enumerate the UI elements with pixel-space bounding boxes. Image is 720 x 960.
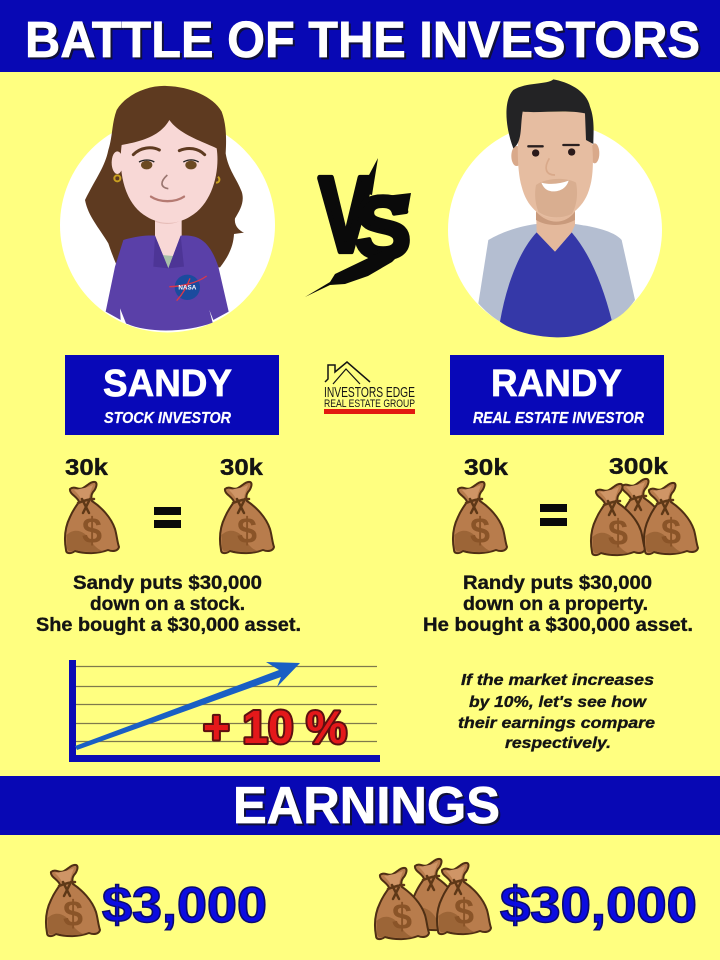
Sandy earrings [114, 175, 219, 183]
text block: Sandy description: down on a stock. [90, 594, 245, 615]
panel: Sandy name plate: SANDY [103, 363, 232, 405]
icon: money bag [46, 865, 100, 936]
NASA patch: NASA [178, 284, 197, 291]
text block: market note: their earnings compare [458, 715, 655, 732]
chart: market up 10 percent [69, 660, 380, 762]
icon: money bag [453, 482, 507, 553]
panel: Sandy equation: 30k [220, 454, 263, 480]
panel: Sandy equation: 30k [65, 454, 108, 480]
Sandy brows, eyes, nose, mouth [133, 148, 205, 155]
icon: money bag [65, 482, 119, 553]
text block: Randy description: down on a property. [463, 594, 648, 615]
text block: Randy description: Randy puts $30,000 [463, 573, 652, 594]
text block: Sandy description: She bought a $30,000 asset. [36, 615, 301, 636]
amount: $30,000 [500, 877, 697, 933]
icon: three money bags [375, 859, 491, 939]
VS emblem [305, 155, 411, 297]
panel: Randy name plate: RANDY [491, 363, 622, 405]
arrow [75, 662, 300, 750]
panel: Randy portrait [448, 79, 662, 337]
logo: Investors Edge: REAL ESTATE GROUP [324, 398, 415, 410]
logo: Investors Edge: INVESTORS EDGE [324, 384, 415, 401]
Sandy face [121, 120, 217, 223]
Sandy hair [85, 86, 244, 267]
Randy jacket [478, 224, 635, 322]
Randy brows, eyes, nose, mouth [528, 145, 579, 146]
Sandy purple shirt [106, 235, 229, 331]
text block: market note: respectively. [505, 735, 611, 752]
icon: three money bags: $ [454, 891, 474, 932]
panel: Randy equation: 30k [464, 454, 508, 480]
NASA patch [169, 275, 207, 301]
amount: $3,000 [102, 877, 267, 933]
earnings banner: EARNINGS [235, 779, 502, 837]
logo: Investors Edge [324, 362, 415, 414]
panel: Sandy equation [65, 454, 274, 553]
Randy hair [506, 79, 594, 148]
panel: Sandy portrait [60, 86, 275, 332]
panel: Randy name plate [450, 355, 664, 435]
panel: Randy equation: 300k [609, 453, 668, 479]
Randy ears [511, 146, 522, 166]
panel: Sandy name plate [65, 355, 279, 435]
icon: money bag: $ [82, 510, 102, 551]
Sandy ear [112, 151, 123, 174]
title banner: BATTLE OF THE INVESTORS [27, 13, 702, 70]
panel: Randy earnings [375, 859, 697, 939]
Randy neck [536, 207, 575, 252]
text block: Sandy description [36, 573, 301, 636]
text block: market note: If the market increases [461, 672, 654, 689]
icon: three money bags: $ [392, 896, 412, 937]
panel: Randy equation [453, 453, 698, 555]
text block: market note [458, 672, 655, 752]
text block: market note: by 10%, let's see how [469, 694, 647, 711]
panel: Sandy earnings [46, 865, 267, 936]
text block: Randy description [423, 573, 693, 636]
panel: Randy name plate: REAL ESTATE INVESTOR [473, 410, 644, 427]
panel: Sandy name plate: STOCK INVESTOR [104, 410, 231, 427]
Sandy neck [155, 213, 182, 268]
icon: three money bags [591, 479, 698, 555]
icon: money bag: $ [63, 893, 83, 934]
earnings banner [0, 776, 720, 837]
Randy beard [535, 179, 577, 217]
plus ten percent label: + 10 % [203, 701, 347, 753]
Randy blue shirt [500, 232, 612, 337]
VS emblem: V [319, 155, 372, 274]
icon: money bag [220, 482, 274, 553]
icon: three money bags: $ [608, 512, 628, 553]
Randy face [518, 112, 593, 218]
icon: three money bags: $ [661, 511, 681, 552]
text block: Sandy description: Sandy puts $30,000 [73, 573, 262, 594]
equals sign [540, 504, 567, 526]
icon: money bag: $ [470, 510, 490, 551]
VS emblem: S [355, 179, 411, 275]
icon: money bag: $ [237, 510, 257, 551]
title banner: BATTLE OF THE INVESTORS [25, 11, 700, 68]
equals sign [154, 507, 181, 528]
text block: Randy description: He bought a $300,000 asset. [423, 615, 693, 636]
earnings banner: EARNINGS [233, 777, 500, 835]
